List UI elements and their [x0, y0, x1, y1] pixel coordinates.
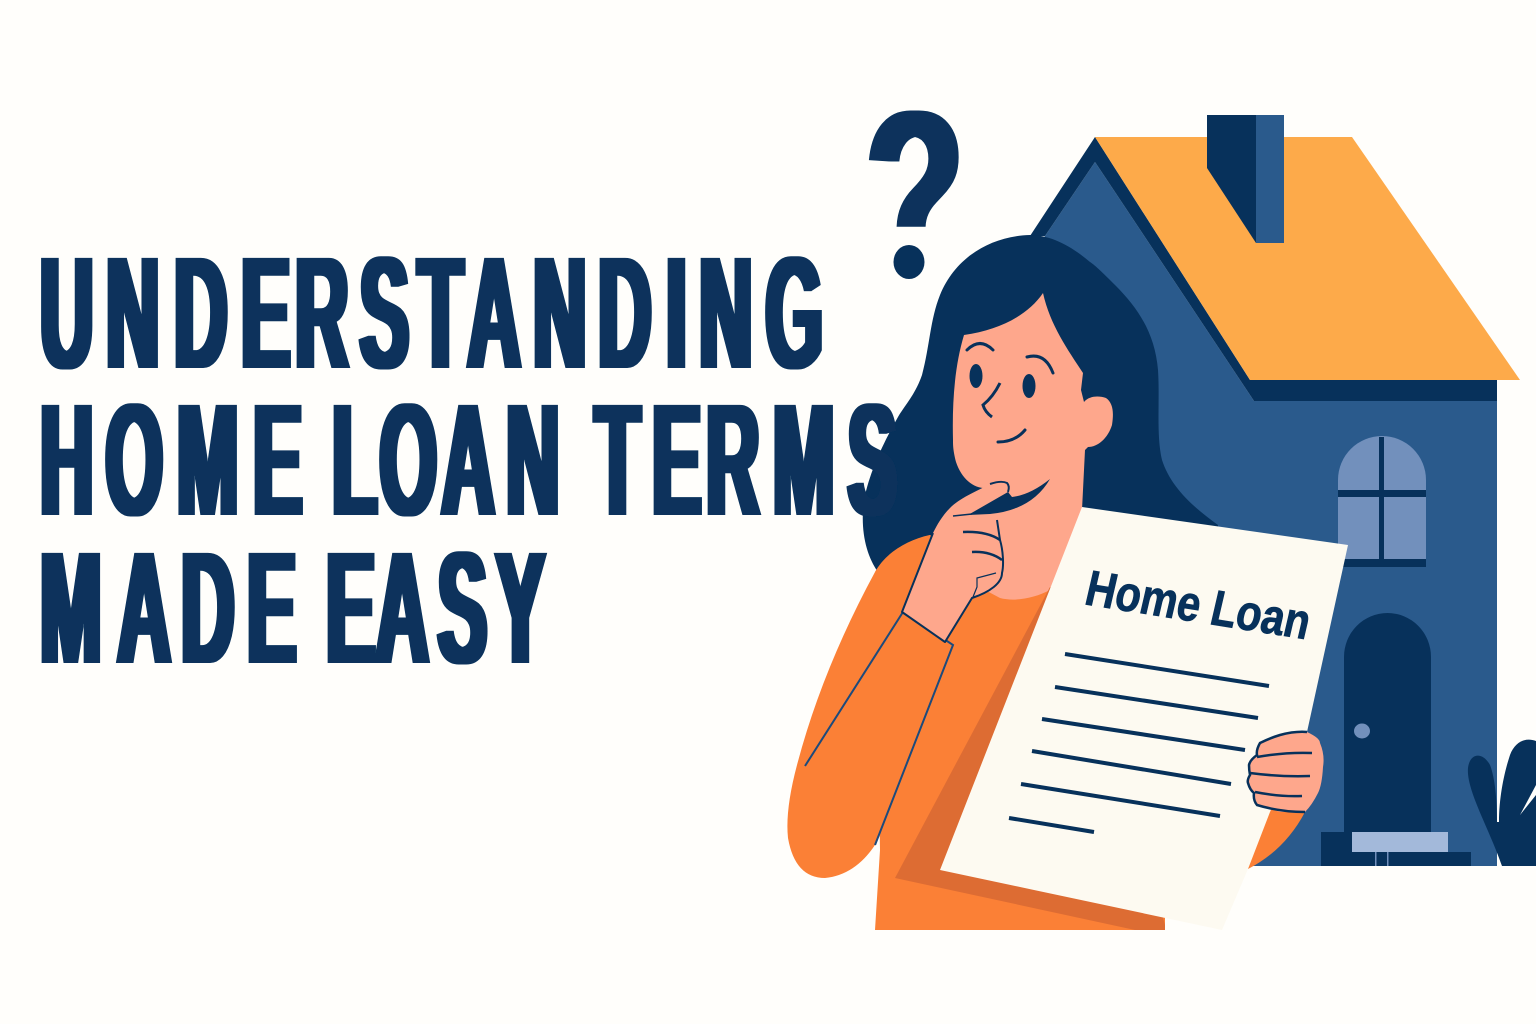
front steps: [1321, 832, 1471, 866]
door: [1344, 613, 1431, 832]
left eye: [970, 364, 982, 388]
thinking hand: [902, 482, 1009, 642]
title: MADE EASY: [40, 519, 545, 698]
paper shadow: [895, 587, 1165, 930]
house wall: [1000, 162, 1497, 866]
title: HOME LOAN TERMS: [40, 371, 897, 550]
plant: [1468, 740, 1536, 866]
question mark dot: [894, 245, 924, 279]
window: [1338, 436, 1426, 567]
left eyebrow: [967, 344, 993, 350]
hair: [863, 235, 1218, 572]
document: [940, 507, 1348, 930]
chimney: [1207, 115, 1284, 243]
document text lines: [1009, 654, 1269, 832]
question mark hook: ?: [866, 62, 964, 326]
nose: [983, 383, 1000, 417]
icon: house: [1000, 115, 1536, 866]
right eyebrow: [1027, 356, 1053, 373]
title: UNDERSTANDING: [40, 224, 823, 403]
illustration: woman holding loan document: [787, 235, 1348, 930]
neck and face: [953, 293, 1113, 600]
document title: Home Loan: [1081, 560, 1316, 650]
smile: [998, 430, 1025, 442]
right sleeve: [1235, 805, 1305, 869]
roof: [1095, 137, 1520, 380]
right eye: [1022, 374, 1036, 398]
title: [40, 224, 897, 698]
icon: question mark: [868, 110, 959, 279]
holding hand: [1248, 732, 1324, 812]
paper sheet: [940, 507, 1348, 930]
torso: [875, 535, 1165, 930]
jaw shadow: [968, 479, 1050, 515]
roof underside shadow: [1030, 137, 1497, 401]
arm sleeve: [787, 535, 953, 878]
sleeve outline: [805, 612, 953, 845]
